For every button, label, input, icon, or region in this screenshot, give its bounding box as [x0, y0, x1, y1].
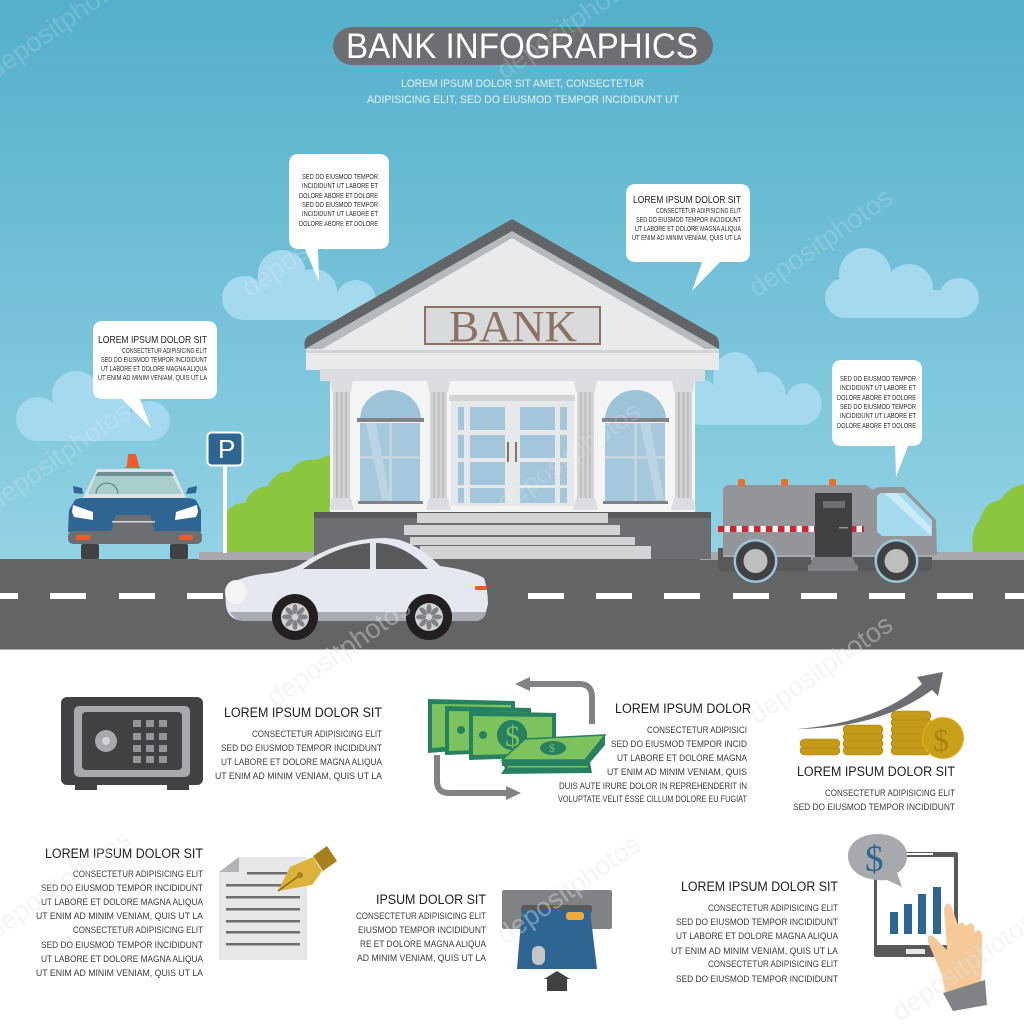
text: coins: LOREM IPSUM DOLOR SIT — [797, 764, 955, 779]
bank building — [304, 219, 719, 559]
icon: tablet with hand: $ — [865, 839, 884, 880]
speech bubble: top right: CONSECTETUR ADIPISICING ELIT — [656, 208, 742, 215]
speech bubble: left — [93, 321, 217, 428]
subtitle: LOREM IPSUM DOLOR SIT AMET, CONSECTETUR — [401, 78, 644, 90]
entablature — [306, 349, 719, 381]
speech bubble: top left — [289, 154, 389, 282]
left window — [357, 390, 424, 504]
speech bubble: top right — [626, 184, 750, 291]
text: document: SED DO EIUSMOD TEMPOR INCIDIDUNT — [41, 940, 203, 951]
text: document: LOREM IPSUM DOLOR SIT — [45, 846, 203, 861]
text: document: UT ENIM AD MINIM VENIAM, QUIS UT LA — [36, 911, 204, 922]
arrow: top — [515, 677, 592, 724]
bills — [428, 699, 556, 760]
columns — [329, 380, 696, 510]
icon: card in ATM slot — [502, 890, 612, 991]
speech bubble: top left: SED DO EIUSMOD TEMPOR — [302, 202, 378, 209]
text: tablet — [671, 879, 839, 985]
speech bubble: left: UT ENIM AD MINIM VENIAM, QUIS UT LA — [98, 375, 207, 382]
parking sign — [208, 432, 242, 553]
speech bubble: right: DOLORE ABORE ET DOLORE — [837, 423, 916, 430]
title banner: BANK INFOGRAPHICS — [346, 27, 698, 66]
text: document: CONSECTETUR ADIPISICING ELIT — [73, 869, 203, 880]
text: document: UT ENIM AD MINIM VENIAM, QUIS UT LA — [36, 968, 204, 979]
text: document: SED DO EIUSMOD TEMPOR INCIDIDUNT — [41, 883, 203, 894]
icon: coins and growth arrow: $ — [933, 722, 949, 758]
text: money: LOREM IPSUM DOLOR — [615, 701, 751, 716]
text: money: DUIS AUTE IRURE DOLOR IN REPREHENDERIT IN — [559, 781, 747, 792]
text: tablet: UT ENIM AD MINIM VENIAM, QUIS UT LA — [671, 946, 839, 957]
text: tablet: UT LABORE ET DOLORE MAGNA ALIQUA — [676, 931, 839, 942]
text: coins — [793, 764, 955, 813]
text: document: UT LABORE ET DOLORE MAGNA ALIQUA — [41, 897, 204, 908]
speech bubble: right: INCIDIDUNT UT LABORE ET — [840, 413, 917, 420]
bank wall — [330, 380, 695, 512]
text: card: RE ET DOLORE MAGNA ALIQUA — [360, 939, 487, 950]
speech bubble: top left: DOLORE ABORE ET DOLORE — [299, 193, 378, 200]
speech bubble: top right: LOREM IPSUM DOLOR SIT — [633, 194, 741, 206]
icon: tablet with hand — [848, 834, 987, 1011]
subtitle: ADIPISICING ELIT, SED DO EIUSMOD TEMPOR INCIDIDUNT UT — [367, 94, 679, 106]
text: tablet: CONSECTETUR ADIPISICING ELIT — [708, 903, 838, 914]
watermark: depositphotos — [743, 182, 898, 303]
speech bubble: top left: INCIDIDUNT UT LABORE ET — [302, 183, 379, 190]
text: safe: UT ENIM AD MINIM VENIAM, QUIS UT LA — [215, 771, 383, 782]
text: document: UT LABORE ET DOLORE MAGNA ALIQUA — [41, 954, 204, 965]
text: document — [36, 846, 204, 979]
speech bubble: left: SED DO EIUSMOD TEMPOR INCIDIDUNT — [101, 357, 208, 364]
icon: money with arrows — [428, 677, 605, 800]
speech bubble: top right: UT LABORE ET DOLORE MAGNA ALIQUA — [635, 226, 741, 233]
text: card: AD MINIM VENIAM, QUIS UT LA — [357, 953, 487, 964]
road — [0, 552, 1024, 650]
text: money: VOLUPTATE VELIT ESSE CILLUM DOLORE EU FUGIAT — [558, 794, 747, 805]
speech bubble: right: INCIDIDUNT UT LABORE ET — [840, 385, 917, 392]
armored van — [718, 479, 937, 583]
bushes — [227, 455, 1024, 553]
subtitle — [367, 78, 679, 106]
text: tablet: LOREM IPSUM DOLOR SIT — [681, 879, 838, 894]
speech bubble: top left: INCIDIDUNT UT LABORE ET — [302, 211, 379, 218]
watermark: depositphotos — [261, 592, 416, 713]
text: money — [558, 701, 751, 805]
speech bubble: right: SED DO EIUSMOD TEMPOR — [840, 404, 916, 411]
text: card: EIUSMOD TEMPOR INCIDIDUNT — [358, 925, 486, 936]
speech bubble: left: LOREM IPSUM DOLOR SIT — [98, 334, 207, 346]
icon: document and pen — [219, 846, 337, 960]
text: document: CONSECTETUR ADIPISICING ELIT — [73, 925, 203, 936]
steps — [404, 513, 651, 559]
right window — [602, 390, 669, 504]
stack of bills — [501, 735, 605, 774]
text: money: UT LABORE ET DOLORE MAGNA — [617, 753, 748, 764]
text: card: CONSECTETUR ADIPISICING ELIT — [356, 911, 486, 922]
text: money: SED DO EIUSMOD TEMPOR INCID — [611, 739, 747, 750]
watermark: depositphotos — [491, 396, 646, 517]
text: safe: SED DO EIUSMOD TEMPOR INCIDIDUNT — [221, 743, 382, 754]
icon: safe — [61, 697, 203, 790]
speech bubble: top right: UT ENIM AD MINIM VENIAM, QUIS UT LA — [632, 235, 741, 242]
text: safe: CONSECTETUR ADIPISICING ELIT — [252, 729, 382, 740]
speech bubble: right — [832, 360, 922, 477]
text: safe: LOREM IPSUM DOLOR SIT — [224, 705, 382, 720]
text: money: UT ENIM AD MINIM VENIAM, QUIS — [607, 767, 747, 778]
speech bubble: left: UT LABORE ET DOLORE MAGNA ALIQUA — [101, 366, 207, 373]
pediment and roof — [304, 219, 719, 349]
watermark: depositphotos — [236, 182, 391, 303]
text: safe: UT LABORE ET DOLORE MAGNA ALIQUA — [221, 757, 383, 768]
text: safe — [215, 705, 383, 782]
watermark: depositphotos — [743, 609, 898, 730]
icon: coins and growth arrow — [797, 672, 964, 758]
bills: $ — [505, 720, 520, 753]
white car — [225, 538, 488, 640]
watermark: depositphotos — [491, 829, 646, 950]
police car — [68, 454, 202, 559]
stack of bills: $ — [549, 741, 555, 755]
text: tablet: CONSECTETUR ADIPISICING ELIT — [708, 959, 838, 970]
arrow: bottom — [437, 755, 521, 800]
text: card: IPSUM DOLOR SIT — [376, 892, 486, 907]
text: card — [356, 892, 487, 964]
speech bubble: right: DOLORE ABORE ET DOLORE — [837, 395, 916, 402]
sky background — [0, 0, 1024, 560]
clouds — [16, 248, 979, 441]
text: tablet: SED DO EIUSMOD TEMPOR INCIDIDUNT — [676, 974, 838, 985]
text: tablet: SED DO EIUSMOD TEMPOR INCIDIDUNT — [676, 917, 838, 928]
speech bubble: top left: SED DO EIUSMOD TEMPOR — [302, 174, 378, 181]
text: money: CONSECTETUR ADIPISICI — [647, 725, 747, 736]
speech bubble: top right: SED DO EIUSMOD TEMPOR INCIDIDUNT — [636, 217, 742, 224]
door — [449, 395, 575, 506]
bank sign: BANK — [449, 302, 577, 351]
text: coins: CONSECTETUR ADIPISICING ELIT — [825, 788, 955, 799]
speech bubble: right: SED DO EIUSMOD TEMPOR — [840, 376, 916, 383]
text: coins: SED DO EIUSMOD TEMPOR INCIDIDUNT — [793, 802, 955, 813]
speech bubble: top left: DOLORE ABORE ET DOLORE — [299, 221, 378, 228]
bank plinth — [314, 512, 711, 559]
parking sign: P — [218, 434, 235, 464]
speech bubble: left: CONSECTETUR ADIPISICING ELIT — [122, 348, 208, 355]
